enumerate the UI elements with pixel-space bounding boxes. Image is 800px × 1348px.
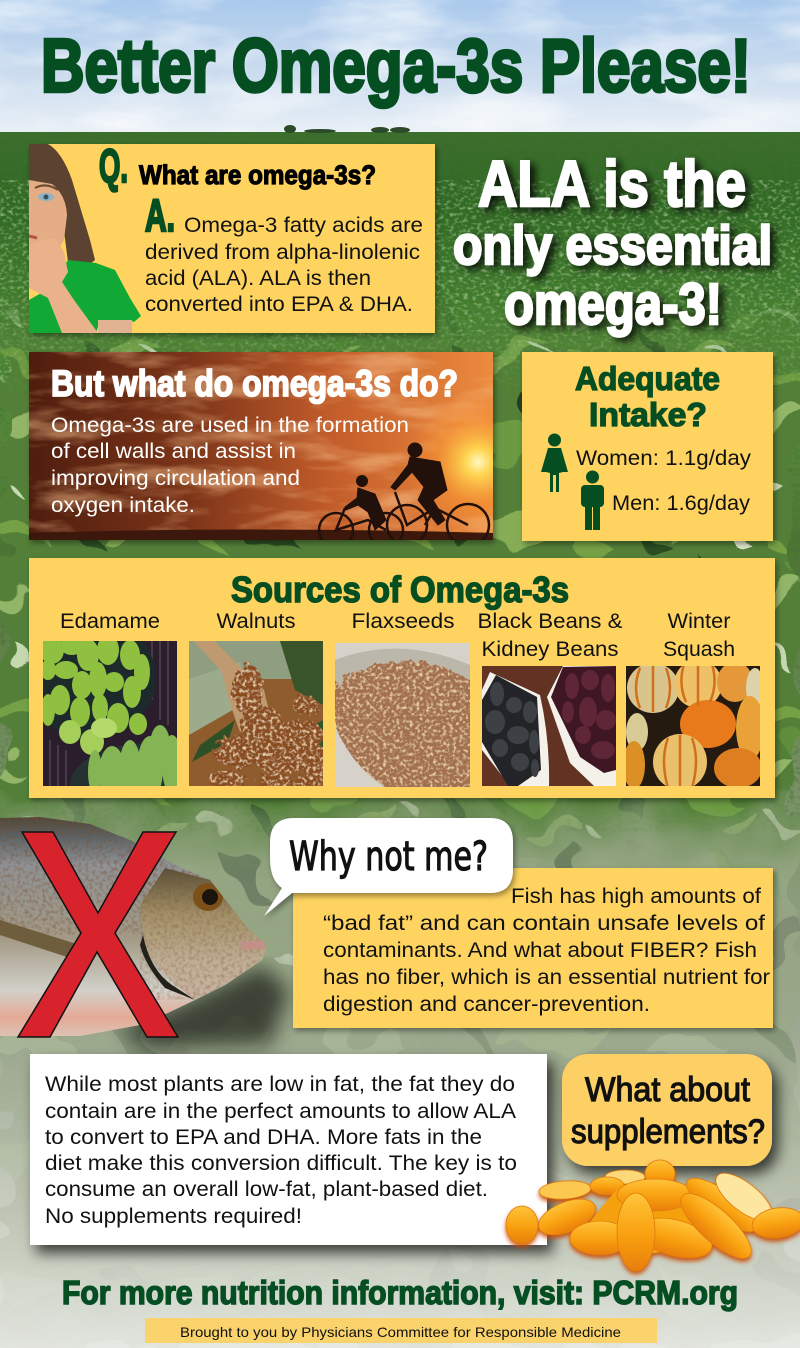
illustration: cyclists silhouette [319,443,489,547]
body text: contaminants. And what about FIBER? Fish [323,938,757,962]
panel: plants text: consume an overall low-fat, plant-based diet. [45,1177,488,1201]
panel: plants text: No supplements required! [45,1204,302,1228]
answer text: derived from alpha-linolenic [145,240,420,264]
body text: has no fiber, which is an essential nutrient for [323,965,770,989]
photo: black beans and kidney beans [482,666,616,786]
callout: what about supplements: supplements? [571,1113,765,1151]
panel: plants text: While most plants are low in fat, the fat they do [45,1072,515,1096]
heading: Adequate [575,360,720,397]
photo: edamame [43,641,177,786]
body text [323,884,770,1016]
men intake: Men: 1.6g/day [612,491,750,515]
speech bubble: why not me [264,818,513,916]
body text: “bad fat” and can contain unsafe levels of [323,911,765,935]
body text [51,413,409,517]
headline: ALA is the only essential omega-3: ALA is the [478,147,746,220]
fish [0,815,270,1040]
footer call to action: For more nutrition information, visit: PCRM.org [62,1274,738,1311]
illustration: fish crossed out [0,815,290,1050]
panel: plants text: to convert to EPA and DHA. More fats in the [45,1125,482,1149]
illustration: thoughtful woman [29,144,141,333]
icon: woman [541,434,568,492]
food labels: Winter [668,609,730,633]
food labels [60,609,735,661]
heading: Sources of Omega-3s [231,569,569,610]
answer text [145,213,423,316]
headline: ALA is the only essential omega-3: omega-3! [504,272,722,337]
panel: what do omega-3s do [28,352,498,546]
food labels: Walnuts [216,609,296,633]
panel: sources of omega-3s [24,558,775,827]
credit strip: Brought to you by Physicians Committee for Responsible Medicine [180,1324,621,1340]
body text: of cell walls and assist in [51,439,296,463]
body text: Omega-3s are used in the formation [51,413,409,437]
photo: flaxseeds [335,643,470,787]
credit strip [145,1318,657,1343]
panel: why not fish [293,868,773,1028]
photo: walnuts [189,641,329,790]
food labels: Edamame [60,609,160,633]
body text: Fish has high amounts of [511,884,761,908]
food labels: Kidney Beans [482,637,618,661]
callout: what about supplements: What about [585,1071,751,1109]
icon: man [581,470,604,530]
panel: adequate intake [522,352,773,541]
headline: ALA is the only essential omega-3 [453,147,772,337]
food labels: Black Beans & [478,609,622,633]
panel: what are omega-3s [29,139,435,333]
answer text: converted into EPA & DHA. [145,292,413,316]
body text: oxygen intake. [51,493,195,517]
red X [18,832,178,1037]
answer text: Omega-3 fatty acids are [184,213,423,237]
speech bubble: why not me: Why not me? [289,834,488,880]
heading [575,360,720,433]
photo: winter squash [626,666,760,786]
panel: plants text [30,1054,547,1245]
callout: what about supplements [562,1054,772,1166]
body text: digestion and cancer-prevention. [323,992,650,1016]
heading: Intake? [589,396,707,433]
women intake: Women: 1.1g/day [576,446,751,470]
food labels: Squash [663,637,735,661]
Q label: Q. [99,139,128,192]
question: What are omega-3s? [139,160,376,190]
panel: plants text: contain are in the perfect amounts to allow ALA [45,1099,517,1123]
A label: A. [145,190,175,241]
food labels: Flaxseeds [352,609,454,633]
illustration: omega-3 capsules [506,1160,800,1271]
heading: But what do omega-3s do? [51,363,458,404]
panel: plants text: diet make this conversion difficult. The key is to [45,1151,517,1175]
body text: improving circulation and [51,466,300,490]
answer text: acid (ALA). ALA is then [145,266,371,290]
